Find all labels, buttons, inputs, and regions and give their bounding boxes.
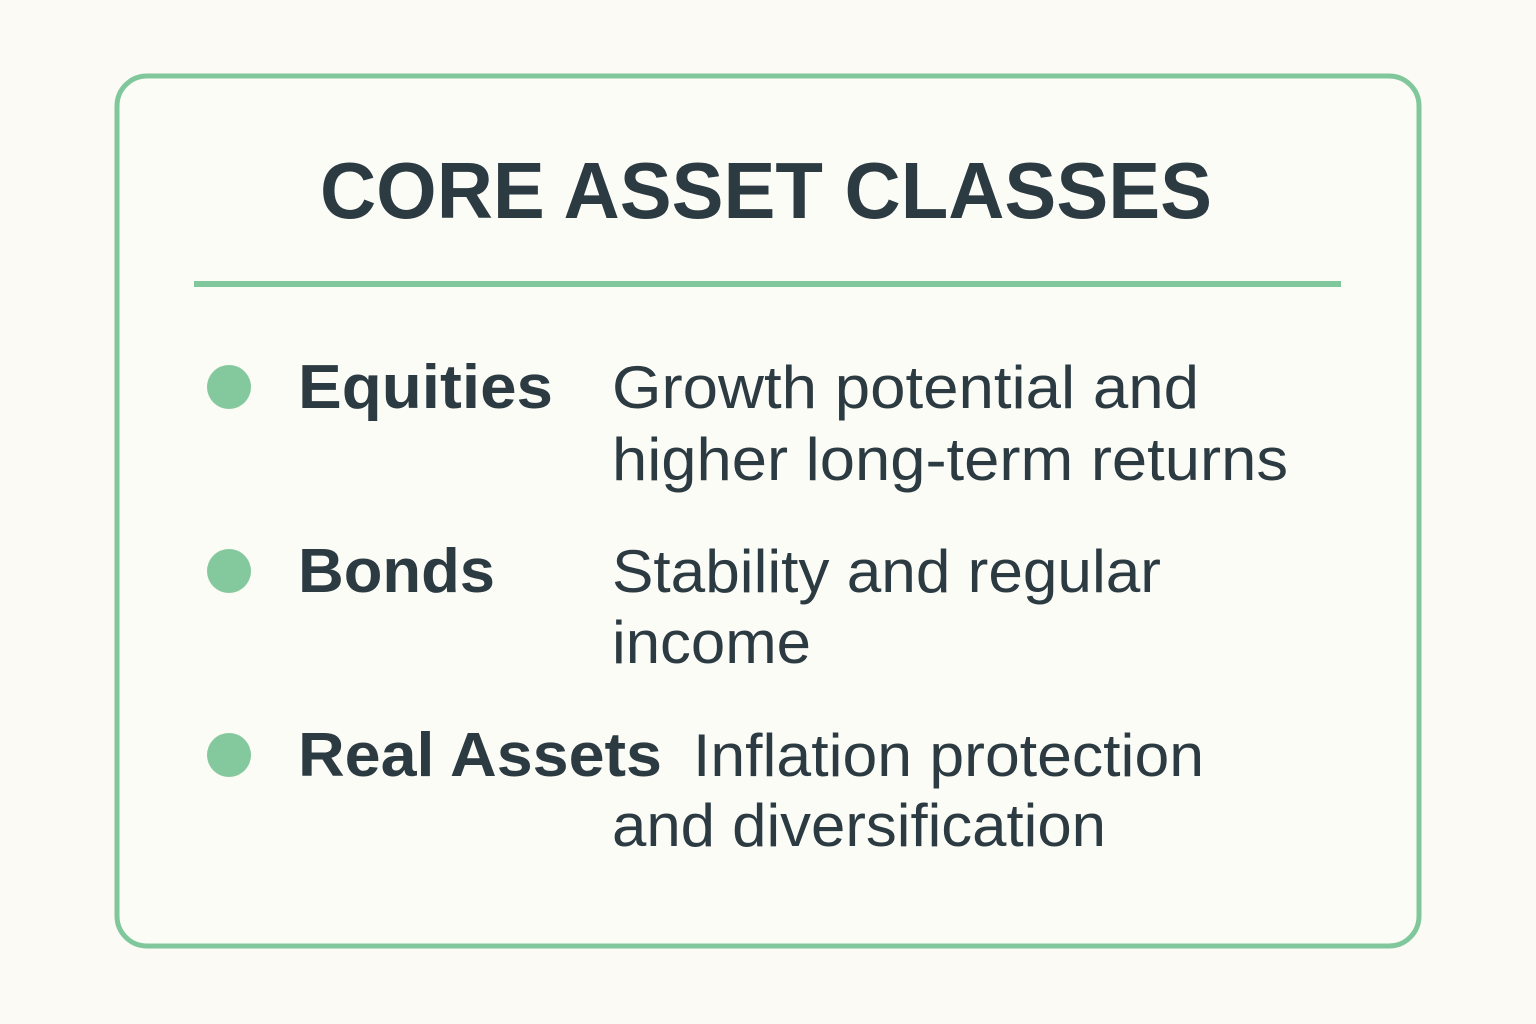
panel: core asset classes card: [117, 76, 1419, 946]
description: equities: higher long-term returns: [612, 426, 1288, 493]
description: real assets: Inflation protection: [693, 722, 1204, 789]
item: real assets: [207, 721, 1204, 859]
description: bonds: income: [612, 609, 811, 676]
icon: bullet bonds: [207, 549, 251, 593]
label: real assets: Real Assets: [298, 721, 662, 790]
item: bonds: [207, 537, 1161, 676]
item: equities: [207, 353, 1288, 493]
title: CORE ASSET CLASSES: [320, 146, 1212, 235]
label: bonds: Bonds: [298, 537, 495, 606]
description: real assets: [612, 722, 1204, 859]
description: equities: Growth potential and: [612, 354, 1199, 421]
description: bonds: [612, 538, 1161, 676]
icon: bullet real assets: [207, 733, 251, 777]
icon: bullet equities: [207, 365, 251, 409]
description: real assets: and diversification: [612, 792, 1106, 859]
description: bonds: Stability and regular: [612, 538, 1161, 605]
description: equities: [612, 354, 1288, 493]
label: equities: Equities: [298, 353, 553, 422]
